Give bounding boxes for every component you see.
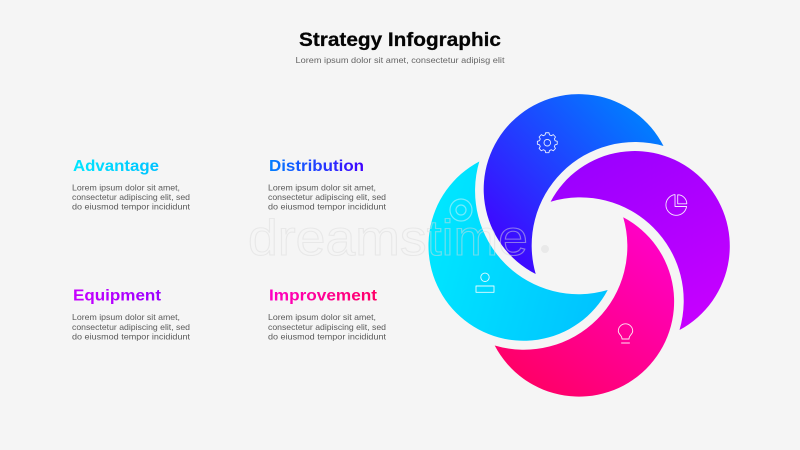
heading: Advantage: Advantage	[73, 158, 159, 175]
body: Equipment: Lorem ipsum dolor sit amet,	[72, 312, 180, 322]
body: Distribution: Lorem ipsum dolor sit amet,	[268, 182, 376, 192]
text block: Distribution	[268, 158, 387, 212]
heading: Distribution: Distribution	[269, 158, 364, 175]
text block: Advantage	[72, 158, 191, 212]
body: Equipment	[72, 312, 191, 342]
segment: magenta	[495, 217, 674, 397]
body: Distribution: do eiusmod tempor incididunt	[268, 202, 387, 212]
title: Strategy Infographic	[299, 29, 501, 51]
body: Equipment: consectetur adipiscing elit, sed	[72, 322, 190, 332]
body: Improvement: Lorem ipsum dolor sit amet,	[268, 312, 376, 322]
body: Distribution	[268, 182, 387, 212]
segment: blue	[484, 94, 664, 274]
body: Advantage	[72, 182, 191, 212]
body: Advantage: do eiusmod tempor incididunt	[72, 202, 191, 212]
body: Improvement: consectetur adipiscing elit, sed	[268, 322, 386, 332]
icon: pie chart	[666, 195, 687, 215]
subtitle: Lorem ipsum dolor sit amet, consectetur adipisg elit	[296, 55, 505, 65]
icon: person	[476, 273, 494, 292]
segment: purple	[551, 151, 730, 330]
body: Equipment: do eiusmod tempor incididunt	[72, 332, 191, 342]
segment: cyan	[428, 162, 608, 341]
heading: Improvement: Improvement	[269, 288, 378, 304]
body: Improvement	[268, 312, 387, 342]
body: Advantage: Lorem ipsum dolor sit amet,	[72, 182, 180, 192]
watermark: dreamstime	[248, 210, 528, 266]
text block: Improvement	[268, 288, 387, 342]
heading: Equipment: Equipment	[73, 288, 162, 304]
body: Improvement: do eiusmod tempor incididunt	[268, 332, 387, 342]
body: Distribution: consectetur adipiscing elit, sed	[268, 192, 386, 202]
body: Advantage: consectetur adipiscing elit, sed	[72, 192, 190, 202]
text block: Equipment	[72, 288, 191, 342]
swirl diagram	[428, 94, 730, 397]
icon: gear	[537, 133, 557, 153]
icon: light bulb	[618, 324, 633, 343]
